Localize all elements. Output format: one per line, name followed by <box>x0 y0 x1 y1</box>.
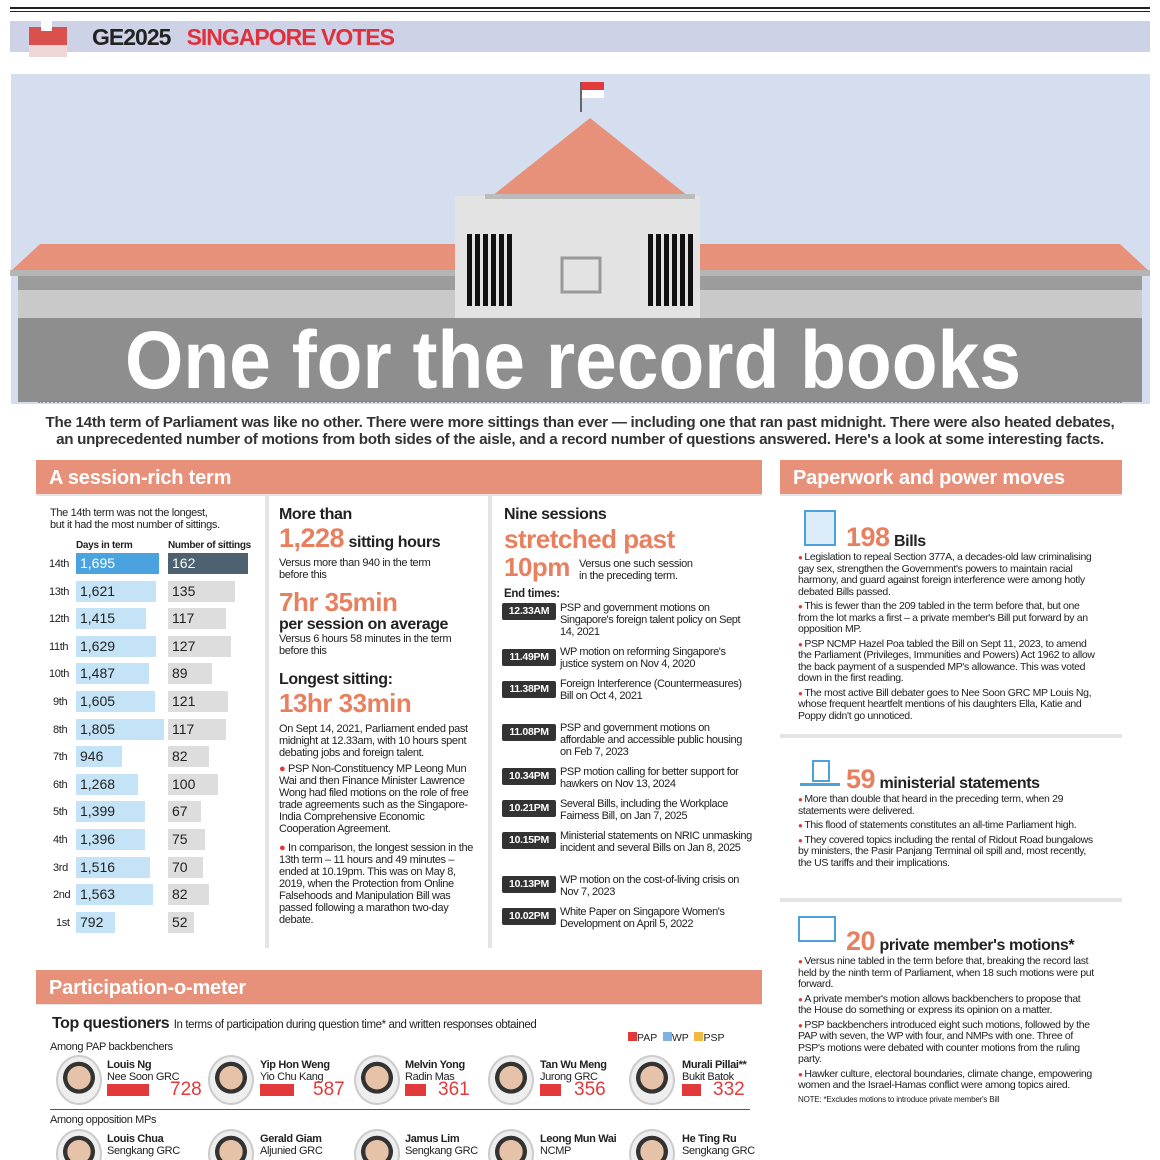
column 2: sitting hours: before this <box>279 569 327 581</box>
PAP questioners: Bukit Batok <box>682 1071 734 1083</box>
section: private member's motions <box>780 902 1122 1160</box>
intro text: an unprecedented number of motions from both sides of the aisle, and a record number of questions answered. Here's a look at some interesting facts. <box>56 431 1104 448</box>
column 1: days and sittings chart: 82 <box>172 886 188 902</box>
section: bills: The most active Bill debater goes to Nee Soon GRC MP Louis Ng, whose frequent heartfelt mentions of his daughters Ella, Katie and Poppy didn't go unnoticed. <box>798 686 1091 722</box>
section: bills: Legislation to repeal Section 377A, a decades-old law criminalising gay sex, strengthen the Government's powers to maintain racial harmony, and guard against foreign interference were among hotly debated Bills passed. <box>798 551 1091 598</box>
PAP questioners: Tan Wu Meng <box>540 1059 607 1071</box>
column 1: days and sittings chart: 1,621 <box>80 583 115 599</box>
section: private member's motions: Hawker culture, electoral boundaries, climate change, empowering women and the Israel-Hamas conflict were among topics aired. <box>798 1068 1092 1091</box>
section: private member's motions: Versus nine tabled in the term before that, breaking the record last held by the ninth term of Parliament, when 18 such motions were put forward. <box>798 955 1094 990</box>
icon: ballot box <box>29 21 67 57</box>
opposition questioners: Sengkang GRC <box>405 1145 478 1157</box>
section: bills: PSP NCMP Hazel Poa tabled the Bill on Sept 11, 2023, to amend the Parliament (Privileges, Immunities and Powers) Act 1962 to allow the back payment of a suspended MP's allowance. This was voted down in the first reading. <box>798 638 1095 684</box>
opposition questioners: NCMP <box>540 1145 571 1157</box>
column 3: sessions past 10pm: Versus one such session <box>579 558 693 570</box>
section: bills: This is fewer than the 209 tabled in the term before that, but one from the lot marks a first – a private member's Bill put forward by an opposition MP. <box>798 600 1088 635</box>
column 2: sitting hours: More than <box>279 506 352 523</box>
column 1: days and sittings chart: 1,805 <box>80 721 115 737</box>
column 3: sessions past 10pm: WP motion on the cost-of-living crisis on Nov 7, 2023 <box>560 874 739 898</box>
PAP questioners: Murali Pillai** <box>682 1059 746 1071</box>
PAP questioners: 587 <box>313 1079 345 1100</box>
column 1: days and sittings chart: 135 <box>172 583 195 599</box>
column 1: days and sittings chart: 1st <box>56 917 70 929</box>
column 1: days and sittings chart: 52 <box>172 914 188 930</box>
PAP questioners: Yip Hon Weng <box>260 1059 330 1071</box>
column 2: sitting hours: ● PSP Non-Constituency MP Leong Mun Wai and then Finance Minister Lawrence Wong had filed motions on the role of free trade agreements such as the Singapore-India Comprehensive Economic Cooperation Agreement. <box>279 763 468 835</box>
column 1: days and sittings chart: but it had the most number of sittings. <box>50 519 220 531</box>
panel: participation-o-meter <box>36 970 762 1160</box>
icon: documents <box>804 510 836 546</box>
panel: participation-o-meter: Among opposition MPs <box>50 1114 156 1126</box>
column 3: sessions past 10pm: Several Bills, including the Workplace Fairness Bill, on Jan 7, 2025 <box>560 798 728 822</box>
panel: paperwork and power moves <box>780 460 1122 1160</box>
column 3: sessions past 10pm: 12.33AM <box>509 605 549 617</box>
column 1: days and sittings chart: 7th <box>53 751 67 763</box>
column 1: days and sittings chart: 1,399 <box>80 803 115 819</box>
PAP questioners: Yio Chu Kang <box>260 1071 323 1083</box>
column 1: days and sittings chart: 1,629 <box>80 638 115 654</box>
column 3: sessions past 10pm: PSP and government motions on Singapore's foreign talent policy on Sept 14, 2021 <box>560 602 740 638</box>
column 1: days and sittings chart: 162 <box>172 555 195 571</box>
column 1: days and sittings chart: 1,563 <box>80 886 115 902</box>
section: ministerial statements: More than double that heard in the preceding term, when 29 statements were delivered. <box>798 793 1063 816</box>
section: ministerial statements: 59 ministerial statements <box>846 764 1040 794</box>
column 2: sitting hours: 1,228 sitting hours <box>279 523 440 553</box>
column 1: days and sittings chart: The 14th term was not the longest, <box>50 507 207 519</box>
column 1: days and sittings chart: 11th <box>49 641 68 653</box>
column 1: days and sittings chart: 117 <box>172 610 194 626</box>
legend: PAP WP PSP <box>637 1032 724 1044</box>
PAP questioners: 356 <box>574 1079 606 1100</box>
column 1: days and sittings chart: 792 <box>80 914 103 930</box>
column 3: sessions past 10pm: 10.15PM <box>509 834 549 846</box>
opposition questioners: Sengkang GRC <box>107 1145 180 1157</box>
column 1: days and sittings chart: 8th <box>53 724 67 736</box>
column 3: sessions past 10pm: 11.38PM <box>509 683 549 695</box>
section: ministerial statements: They covered topics including the rental of Ridout Road bungalows by ministers, the Pasir Panjang Terminal oil spill and, most recently, the US tariffs and their implications. <box>798 834 1093 868</box>
icon: envelope <box>798 916 836 942</box>
section: bills <box>780 496 1122 734</box>
column 2: sitting hours: before this <box>279 645 327 657</box>
section: ministerial statements: This flood of statements constitutes an all-time Parliament high. <box>804 819 1076 831</box>
opposition questioners: Jamus Lim <box>405 1133 459 1145</box>
column 2: sitting hours: 13hr 33min <box>279 688 411 718</box>
column 1: days and sittings chart: 6th <box>53 779 67 791</box>
opposition questioners: Leong Mun Wai <box>540 1133 616 1145</box>
column 1: days and sittings chart: 3rd <box>53 862 68 874</box>
panel: session-rich term <box>36 460 762 948</box>
column 1: days and sittings chart: 946 <box>80 748 103 764</box>
PAP questioners: Louis Ng <box>107 1059 151 1071</box>
column 1: days and sittings chart: 1,415 <box>80 610 115 626</box>
column 1: days and sittings chart: 100 <box>172 776 195 792</box>
section: private member's motions: NOTE: *Excludes motions to introduce private member's Bill <box>798 1094 999 1104</box>
column 1: days and sittings chart: 1,695 <box>80 555 115 571</box>
column 1: days and sittings chart <box>36 496 265 948</box>
column 1: days and sittings chart: 117 <box>172 721 194 737</box>
section: bills: 198 Bills <box>846 522 926 552</box>
PAP questioners: Nee Soon GRC <box>107 1071 179 1083</box>
column 3: sessions past 10pm: 10.02PM <box>509 910 549 922</box>
top rule <box>10 7 1150 12</box>
PAP questioners <box>56 1055 747 1105</box>
column 2: sitting hours: Longest sitting: <box>279 671 393 688</box>
PAP questioners: Jurong GRC <box>540 1071 598 1083</box>
panel: participation-o-meter: Among PAP backbenchers <box>50 1041 173 1053</box>
column 2: sitting hours: Versus more than 940 in the term <box>279 557 430 569</box>
column 3: sessions past 10pm: Foreign Interference (Countermeasures) Bill on Oct 4, 2021 <box>560 678 742 702</box>
column 3: sessions past 10pm: 10.21PM <box>509 802 549 814</box>
heading: top questioners: Top questioners In terms of participation during question time* and written responses obtained <box>52 1015 536 1032</box>
section: ministerial statements <box>780 738 1122 898</box>
column 2: sitting hours: per session on average <box>279 616 448 633</box>
PAP questioners: 361 <box>438 1079 470 1100</box>
column 3: sessions past 10pm <box>492 496 762 948</box>
column 3: sessions past 10pm: Nine sessions <box>504 506 606 523</box>
column 2: sitting hours: 7hr 35min <box>279 587 397 617</box>
masthead text: GE2025 SINGAPORE VOTES <box>92 24 394 50</box>
column 3: sessions past 10pm: 11.49PM <box>509 651 549 663</box>
column 3: sessions past 10pm: 11.08PM <box>509 726 549 738</box>
column 3: sessions past 10pm: PSP and government motions on affordable and accessible public housing on Feb 7, 2023 <box>560 722 742 758</box>
opposition questioners: Gerald Giam <box>260 1133 322 1145</box>
column 1: days and sittings chart: 9th <box>53 696 67 708</box>
column 3: sessions past 10pm: 10pm <box>504 552 570 582</box>
intro text <box>46 414 1114 448</box>
column 2: sitting hours: ● In comparison, the longest session in the 13th term – 11 hours and 49 minutes – ended at 10.19pm. This was on May 8, 2019, when the Protection from Online Falsehoods and Manipulation Bill was passed following a marathon two-day debate. <box>279 842 473 926</box>
column 1: days and sittings chart: 1,516 <box>80 859 115 875</box>
column 3: sessions past 10pm: White Paper on Singapore Women's Development on April 5, 2022 <box>560 906 725 930</box>
column 1: days and sittings chart: 82 <box>172 748 188 764</box>
column 3: sessions past 10pm: 10.34PM <box>509 770 549 782</box>
panel: participation-o-meter: Participation-o-meter <box>49 977 246 999</box>
intro text: The 14th term of Parliament was like no other. There were more sittings than ever — including one that ran past midnight. There were also heated debates, <box>46 414 1114 431</box>
column 1: days and sittings chart: Number of sittings <box>168 540 251 551</box>
panel: paperwork and power moves: Paperwork and power moves <box>793 467 1065 489</box>
opposition questioners: Louis Chua <box>107 1133 163 1145</box>
column 1: days and sittings chart: 1,396 <box>80 831 115 847</box>
hero: parliament building <box>10 74 1150 404</box>
column 1: days and sittings chart: 1,605 <box>80 693 115 709</box>
column 2: sitting hours: Versus 6 hours 58 minutes in the term <box>279 633 451 645</box>
opposition questioners: Aljunied GRC <box>260 1145 322 1157</box>
section: private member's motions: PSP backbenchers introduced eight such motions, followed by the PAP with seven, the WP with four, and NMPs with one. Three of PSP's motions were debated with counter motions from the ruling party. <box>798 1018 1090 1065</box>
column 3: sessions past 10pm: Ministerial statements on NRIC unmasking incident and several Bills on Jan 8, 2025 <box>560 830 752 854</box>
PAP questioners: Melvin Yong <box>405 1059 465 1071</box>
column 1: days and sittings chart: 2nd <box>53 889 70 901</box>
column 1: days and sittings chart: 13th <box>49 586 69 598</box>
opposition questioners: Sengkang GRC <box>682 1145 755 1157</box>
column 1: days and sittings chart: 5th <box>53 806 67 818</box>
section: private member's motions: 20 private member's motions* <box>846 926 1074 956</box>
header band <box>10 21 1150 52</box>
column 1: days and sittings chart: 89 <box>172 665 188 681</box>
section: private member's motions: A private member's motion allows backbenchers to propose that the House do something or express its opinion on a matter. <box>798 992 1080 1016</box>
column 1: days and sittings chart: 1,487 <box>80 665 115 681</box>
column 3: sessions past 10pm: End times: <box>504 588 560 600</box>
column 1: days and sittings chart: 4th <box>53 834 67 846</box>
column 2: sitting hours: On Sept 14, 2021, Parliament ended past midnight at 12.33am, with 10 hours spent debating jobs and foreign talent. <box>279 723 468 759</box>
opposition questioners <box>56 1129 755 1160</box>
panel: session-rich term: A session-rich term <box>49 467 231 489</box>
column 3: sessions past 10pm: WP motion on reforming Singapore's justice system on Nov 4, 2020 <box>560 646 726 670</box>
column 1: days and sittings chart: Days in term <box>76 540 132 551</box>
column 1: days and sittings chart: 127 <box>172 638 195 654</box>
column 1: days and sittings chart: 10th <box>49 668 69 680</box>
column 3: sessions past 10pm: stretched past <box>504 524 675 554</box>
column 1: days and sittings chart: 1,268 <box>80 776 115 792</box>
PAP questioners: 728 <box>170 1079 202 1100</box>
column 1: days and sittings chart: 67 <box>172 803 188 819</box>
PAP questioners: 332 <box>713 1079 745 1100</box>
column 1: days and sittings chart: 70 <box>172 859 188 875</box>
column 1: days and sittings chart: 121 <box>172 693 195 709</box>
column 2: sitting hours <box>269 496 488 948</box>
PAP questioners: Radin Mas <box>405 1071 454 1083</box>
column 3: sessions past 10pm: in the preceding term. <box>579 570 678 582</box>
column 1: days and sittings chart: 14th <box>49 558 69 570</box>
column 3: sessions past 10pm: PSP motion calling for better support for hawkers on Nov 13, 2024 <box>560 766 738 790</box>
icon: speaker at podium <box>800 746 840 786</box>
opposition questioners: He Ting Ru <box>682 1133 736 1145</box>
column 1: days and sittings chart: 12th <box>49 613 69 625</box>
column 3: sessions past 10pm: 10.13PM <box>509 878 549 890</box>
column 1: days and sittings chart: 75 <box>172 831 188 847</box>
